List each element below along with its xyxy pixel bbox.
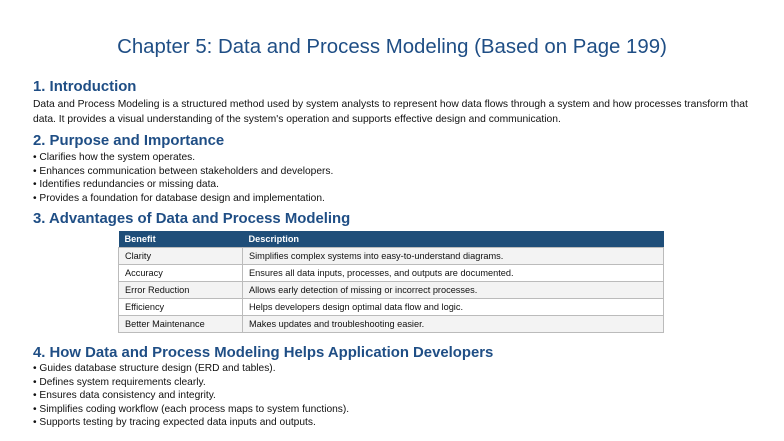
list: purpose: • Identifies redundancies or missing data.: [33, 179, 219, 190]
title: Chapter 5: Data and Process Modeling (Based on Page 199): [117, 36, 667, 58]
table: advantages: Simplifies complex systems into easy-to-understand diagrams.: [249, 251, 503, 261]
list: helps developers: • Ensures data consistency and integrity.: [33, 390, 216, 401]
list: helps developers: • Supports testing by tracing expected data inputs and outputs.: [33, 417, 316, 428]
list: helps developers: • Guides database structure design (ERD and tables).: [33, 363, 276, 374]
text: introduction: data. It provides a visual understanding of the system's operation and supports effective design and communication.: [33, 114, 561, 125]
text: introduction: [33, 99, 748, 125]
list: helps developers: • Defines system requirements clearly.: [33, 377, 206, 388]
list: helps developers: • Simplifies coding workflow (each process maps to system functions).: [33, 404, 349, 415]
list: purpose: • Clarifies how the system operates.: [33, 152, 195, 163]
list: helps developers: [33, 363, 349, 428]
list: purpose: • Enhances communication between stakeholders and developers.: [33, 166, 333, 177]
table: advantages: Description: [248, 234, 299, 244]
text: introduction: Data and Process Modeling is a structured method used by system analysts to represent how data flows through a system and how processes transform that: [33, 99, 748, 110]
table: advantages: Better Maintenance: [125, 319, 205, 329]
table: advantages: Accuracy: [125, 268, 163, 278]
heading: purpose: 2. Purpose and Importance: [33, 133, 224, 149]
table: advantages: Error Reduction: [125, 285, 189, 295]
table: advantages: Helps developers design optimal data flow and logic.: [249, 302, 463, 312]
heading: introduction: 1. Introduction: [33, 79, 136, 95]
table: advantages: Clarity: [125, 251, 151, 261]
heading: helps developers: 4. How Data and Process Modeling Helps Application Developers: [33, 345, 493, 361]
table: advantages: [118, 231, 664, 333]
list: purpose: • Provides a foundation for database design and implementation.: [33, 193, 325, 204]
list: purpose: [33, 152, 333, 204]
heading: advantages: 3. Advantages of Data and Process Modeling: [33, 211, 350, 227]
table: advantages: Ensures all data inputs, processes, and outputs are documented.: [249, 268, 514, 278]
table: advantages: Benefit: [124, 234, 156, 244]
table: advantages: Makes updates and troubleshooting easier.: [249, 319, 424, 329]
table: advantages: Efficiency: [125, 302, 164, 312]
table: advantages: Allows early detection of missing or incorrect processes.: [249, 285, 477, 295]
